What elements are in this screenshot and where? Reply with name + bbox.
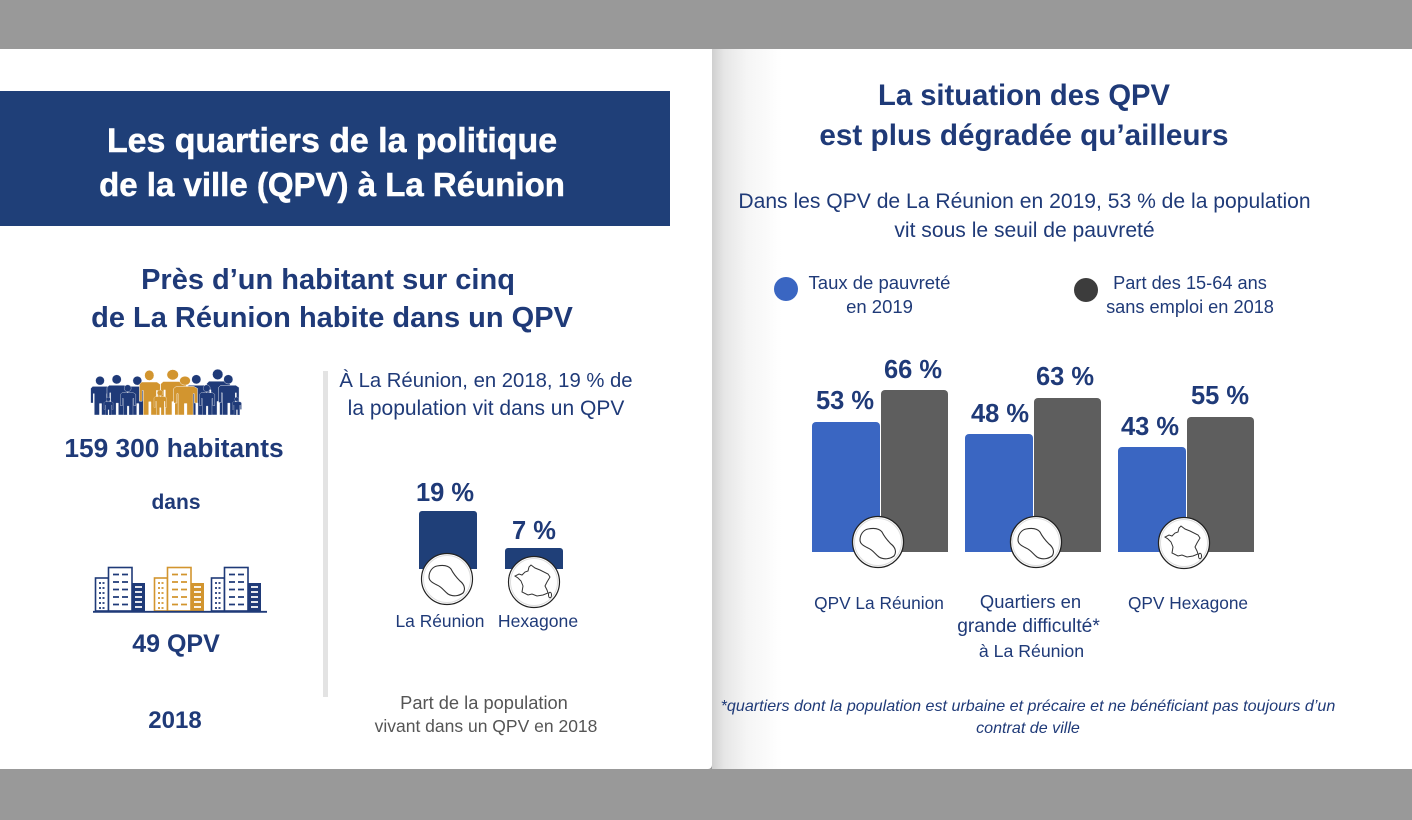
bar: La Réunion	[419, 511, 477, 569]
text: intro right: Dans les QPV de La Réunion en 2019, 53 % de la population	[738, 190, 1311, 213]
group: Quartiers en grande difficulté	[965, 398, 1101, 568]
label: Quartiers en grande difficulté: à La Réunion	[979, 641, 1084, 661]
legend: poverty rate	[774, 272, 950, 317]
panel: left page	[0, 49, 712, 769]
caption: left chart: vivant dans un QPV en 2018	[375, 716, 597, 736]
footnote: contrat de ville	[976, 719, 1080, 737]
footnote	[721, 697, 1335, 737]
text: year: 2018	[148, 707, 202, 734]
panel: right page	[712, 49, 1412, 769]
bar chart: poverty and jobless rates	[812, 390, 1254, 570]
label: La Réunion: La Réunion	[396, 611, 484, 631]
group: QPV La Réunion	[812, 390, 948, 568]
footnote: *quartiers dont la population est urbaine et précaire et ne bénéficiant pas toujours d’un	[721, 697, 1335, 715]
text: intro right	[738, 190, 1311, 242]
heading: right: La situation des QPV	[878, 80, 1170, 112]
legend label: poverty	[808, 272, 950, 317]
value: 43 %: 43 %	[1121, 413, 1179, 441]
value: 48 %: 48 %	[971, 400, 1029, 428]
icon: buildings	[93, 566, 267, 613]
bar: Hexagone	[505, 548, 563, 569]
legend swatch: blue	[774, 277, 798, 301]
divider	[323, 371, 328, 697]
text: dans: dans	[151, 491, 200, 514]
legend label: jobless: Part des 15-64 ans	[1113, 273, 1267, 293]
value: 53 %: 53 %	[816, 387, 874, 415]
heading: left: Près d’un habitant sur cinq	[141, 264, 515, 296]
value: 63 %: 63 %	[1036, 363, 1094, 391]
value: La Réunion: 19 %	[416, 479, 474, 507]
label: Quartiers en grande difficulté	[957, 591, 1100, 661]
icon: La Réunion map	[420, 552, 474, 606]
stat: inhabitants: 159 300 habitants	[64, 433, 284, 463]
title banner	[0, 91, 670, 226]
legend label: jobless: sans emploi en 2018	[1106, 297, 1274, 317]
heading: left	[91, 264, 573, 334]
value: 66 %: 66 %	[884, 356, 942, 384]
text: intro right: vit sous le seuil de pauvreté	[894, 218, 1155, 242]
heading: left: de La Réunion habite dans un QPV	[91, 302, 573, 334]
title: de la ville (QPV) à La Réunion	[99, 166, 565, 203]
label: Quartiers en grande difficulté: grande difficulté*	[957, 616, 1100, 637]
title	[99, 122, 565, 204]
value: Hexagone: 7 %	[512, 517, 556, 545]
caption: left chart	[374, 692, 597, 736]
heading: right	[819, 80, 1229, 152]
caption: left chart: Part de la population	[400, 692, 568, 713]
title: Les quartiers de la politique	[107, 122, 557, 160]
group: QPV Hexagone	[1118, 417, 1254, 568]
text: intro left: la population vit dans un QPV	[348, 397, 624, 420]
text: intro left	[339, 369, 633, 420]
stat: QPV count: 49 QPV	[132, 630, 220, 658]
legend swatch: grey	[1074, 278, 1098, 302]
icon: population group	[90, 369, 242, 415]
legend label: poverty: en 2019	[846, 296, 913, 317]
heading: right: est plus dégradée qu’ailleurs	[819, 119, 1229, 152]
label: Quartiers en grande difficulté: Quartiers en	[980, 591, 1081, 612]
legend label: jobless	[1106, 273, 1274, 317]
text: intro left: À La Réunion, en 2018, 19 % de	[339, 370, 633, 392]
label: QPV La Réunion: QPV La Réunion	[814, 593, 944, 613]
value: 55 %: 55 %	[1191, 382, 1249, 410]
legend: unemployment	[1074, 273, 1274, 317]
icon: France map	[508, 556, 560, 608]
label: QPV Hexagone: QPV Hexagone	[1128, 593, 1248, 613]
legend label: poverty: Taux de pauvreté	[809, 272, 950, 293]
bar chart: population share	[396, 479, 578, 631]
label: Hexagone: Hexagone	[498, 611, 578, 631]
